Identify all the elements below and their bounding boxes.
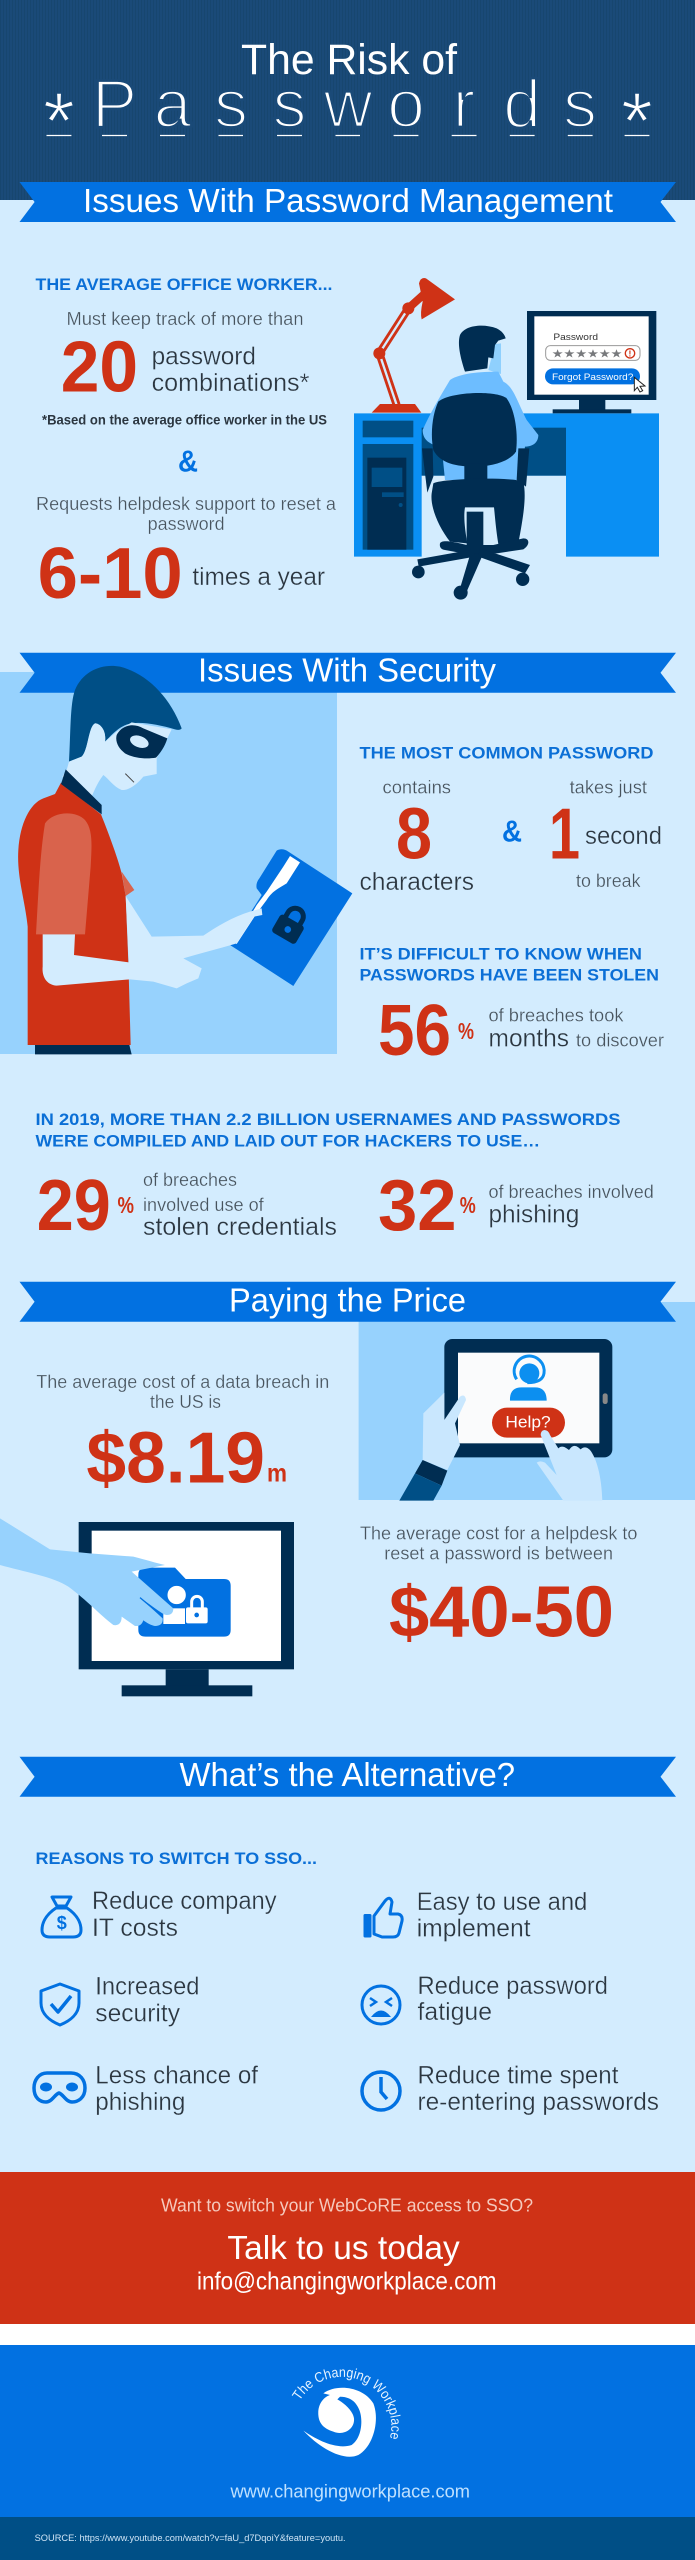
heading: PASSWORDS HAVE BEEN STOLEN: [360, 966, 659, 985]
ribbon: What's the Alternative?: What’s the Alternative?: [180, 1756, 515, 1793]
text: stolen credentials: stolen credentials: [143, 1213, 337, 1241]
text: reduce company IT costs: Reduce company: [92, 1887, 277, 1915]
text: must keep track: Must keep track of more than: [66, 309, 304, 329]
title: Passwords: a: [154, 66, 192, 142]
title: Passwords: *: [621, 76, 653, 168]
hand: [0, 1518, 173, 1626]
text: increased security: [95, 1972, 200, 2028]
monitor with login form: [527, 311, 656, 413]
text: password combinations: combinations*: [152, 369, 310, 397]
panel: footer brand: [0, 2345, 695, 2517]
ribbon: Paying the Price: Paying the Price: [229, 1282, 466, 1319]
text: to break: to break: [576, 871, 641, 891]
text: average cost of breach: The average cost of a data breach in: [36, 1372, 329, 1392]
monitor: [79, 1522, 294, 1696]
title: Passwords: o: [387, 66, 425, 142]
monitor with login form: !: [629, 349, 632, 359]
lamp: [372, 278, 455, 413]
text: requests helpdesk: password: [148, 514, 225, 534]
stat: 32%: 32: [378, 1166, 457, 1246]
text: reduce time spent: [418, 2061, 659, 2116]
title: Passwords: s: [563, 66, 597, 142]
title: Passwords: r: [453, 66, 475, 142]
text: easy to use: [417, 1888, 587, 1943]
illustration: monitor with folder and hand: [0, 1518, 294, 1696]
text: contains: contains: [382, 777, 451, 797]
arm and hand: [43, 896, 262, 988]
icon: shield check: [41, 1984, 79, 2025]
text: reduce password fatigue: [418, 1972, 608, 2026]
text: less chance of phishing: phishing: [95, 2088, 185, 2116]
stat: 6-10: 6-10: [38, 534, 183, 614]
text: phishing: of breaches involved: [488, 1182, 654, 1202]
text: helpdesk cost: The average cost for a helpdesk to: [360, 1523, 637, 1543]
text: of breaches took months: [488, 1006, 664, 1053]
heading: [36, 1110, 620, 1151]
icon: tired face: [362, 1986, 400, 2024]
mask: [116, 725, 167, 782]
trousers: [35, 1045, 132, 1054]
stat: 56%: %: [458, 1018, 474, 1044]
heading: average office worker: THE AVERAGE OFFICE WORKER...: [36, 275, 332, 294]
ribbon: What's the Alternative?: [20, 1756, 676, 1797]
heading: THE MOST COMMON PASSWORD: [360, 743, 654, 762]
text: helpdesk cost: reset a password is between: [384, 1543, 613, 1563]
title: Passwords: [43, 66, 653, 168]
text: source: SOURCE: https://www.youtube.com/watch?v=faU_d7DqoiY&feature=youtu.: [35, 2533, 346, 2543]
text: increased security: security: [95, 2000, 180, 2028]
text: of breaches took months: months: [488, 1025, 569, 1053]
help button: Help?: [505, 1413, 551, 1432]
stat: 8: 8: [396, 794, 432, 874]
text: characters: characters: [360, 868, 474, 896]
heading: [360, 944, 659, 985]
text: requests helpdesk: Requests helpdesk support to reset a: [36, 494, 337, 514]
text: want to switch: Want to switch your WebCoRE access to SSO?: [161, 2196, 533, 2216]
text: helpdesk cost: [360, 1523, 637, 1563]
monitor with login form: ★★★★★★: [552, 348, 622, 360]
panel: reasons to switch: [34, 1849, 659, 2116]
text: reduce time spent: Reduce time spent: [418, 2061, 618, 2089]
icon: mask: [34, 2073, 85, 2102]
footnote: *Based on the average office worker in the US: [42, 412, 327, 427]
text: takes just: takes just: [570, 777, 647, 797]
panel: password management stats: [36, 275, 337, 614]
title: Passwords: P: [92, 66, 137, 142]
title: Passwords: s: [272, 66, 306, 142]
heading: WERE COMPILED AND LAID OUT FOR HACKERS TO USE…: [36, 1132, 540, 1151]
stat: $8.19m: m: [267, 1460, 287, 1488]
folder: [230, 849, 352, 986]
text: talk to us today: Talk to us today: [227, 2229, 460, 2266]
text: reduce company IT costs: IT costs: [92, 1914, 178, 1942]
icon: thumbs up: [364, 1898, 402, 1938]
text: reduce password fatigue: fatigue: [418, 1998, 492, 2026]
text: easy to use: Easy to use and: [417, 1888, 587, 1916]
folder with user and lock: [138, 1568, 231, 1637]
text: times a year: times a year: [192, 563, 325, 591]
ampersand: &: [178, 444, 198, 479]
stat: 1: 1: [549, 794, 580, 874]
text: phishing: [488, 1182, 654, 1229]
heading: REASONS TO SWITCH TO SSO...: [36, 1849, 317, 1868]
text: average cost of breach: [36, 1372, 329, 1412]
heading: IN 2019, MORE THAN 2.2 BILLION USERNAMES AND PASSWORDS: [36, 1110, 620, 1129]
icon: support agent: [510, 1356, 547, 1401]
title: Passwords: w: [322, 66, 373, 142]
header banner: [0, 0, 695, 200]
text: phishing: phishing: [488, 1201, 579, 1229]
panel: 2019 breach stats: [36, 1110, 654, 1246]
ribbon: Paying the Price: [20, 1282, 676, 1322]
text: reduce time spent: re-entering passwords: [418, 2088, 659, 2116]
illustration: worker at desk: [354, 278, 659, 600]
text: email: info@changingworkplace.com: [197, 2267, 496, 2295]
shirt: [18, 769, 134, 1045]
icon: money bag: $: [57, 1913, 67, 1933]
illustration: tablet with help button: [399, 1339, 612, 1501]
title: Passwords: *: [43, 76, 75, 168]
panel: stolen passwords: [360, 944, 664, 1071]
stat: 29%: 29: [37, 1166, 111, 1246]
panel: helpdesk backdrop: [359, 1302, 695, 1500]
stat: 56%: 56: [378, 991, 451, 1071]
text: stolen credentials: involved use of: [143, 1195, 265, 1215]
text: second: second: [585, 822, 662, 850]
text: less chance of phishing: [95, 2061, 258, 2116]
monitor with login form: Password: [553, 332, 598, 342]
panel: call to action: [0, 2172, 695, 2324]
text: requests helpdesk: [36, 494, 337, 534]
ribbon: Issues With Password Management: Issues With Password Management: [83, 182, 613, 219]
title: Passwords: d: [503, 66, 541, 142]
icon: money bag: [42, 1897, 81, 1937]
text: reduce password fatigue: Reduce password: [418, 1972, 608, 2000]
help button: [492, 1408, 565, 1438]
hair: [69, 666, 182, 762]
stat: $8.19m: $8.19: [86, 1418, 265, 1498]
desk: [354, 413, 659, 557]
text: increased security: Increased: [95, 1972, 200, 2000]
left hand: [399, 1393, 466, 1501]
stat: 32%: %: [460, 1192, 476, 1218]
face and neck: [62, 722, 172, 800]
heading: IT’S DIFFICULT TO KNOW WHEN: [360, 944, 642, 963]
text: of breaches took months: to discover: [576, 1031, 664, 1051]
stat: 29%: %: [118, 1192, 134, 1218]
text: password combinations: password: [152, 342, 256, 370]
panel: thief backdrop: [0, 672, 337, 1054]
panel: source bar: [0, 2517, 695, 2560]
panel: most common password: [360, 743, 662, 896]
ampersand: &: [502, 814, 522, 849]
text: easy to use: implement: [417, 1915, 531, 1943]
text: stolen credentials: [143, 1170, 337, 1241]
text: website: www.changingworkplace.com: [229, 2482, 470, 2502]
title: The Risk of: The Risk of: [241, 36, 458, 84]
logo: The Changing Workplace: The Changing Workplace: [292, 2368, 401, 2439]
illustration: masked thief with locked folder: [18, 666, 352, 1054]
tablet: [444, 1339, 612, 1457]
ribbon: Issues With Security: Issues With Security: [198, 652, 496, 689]
text: password combinations: [152, 342, 310, 397]
title: Passwords: s: [214, 66, 248, 142]
panel: helpdesk cost: [360, 1523, 637, 1653]
stat: 20: 20: [61, 328, 138, 408]
text: of breaches took months: of breaches took: [488, 1006, 625, 1026]
text: reduce company IT costs: [92, 1887, 277, 1942]
text: stolen credentials: of breaches: [143, 1170, 237, 1190]
monitor with login form: Forgot Password?: [552, 372, 633, 382]
seated person: [412, 326, 538, 600]
ribbon: Issues With Security: [20, 652, 676, 693]
icon: clock: [362, 2072, 400, 2110]
panel: data breach cost: [36, 1372, 329, 1498]
stat: $40-50: $40-50: [389, 1573, 614, 1653]
text: less chance of phishing: Less chance of: [95, 2061, 258, 2089]
text: average cost of breach: the US is: [150, 1392, 221, 1412]
right hand: [537, 1430, 602, 1501]
